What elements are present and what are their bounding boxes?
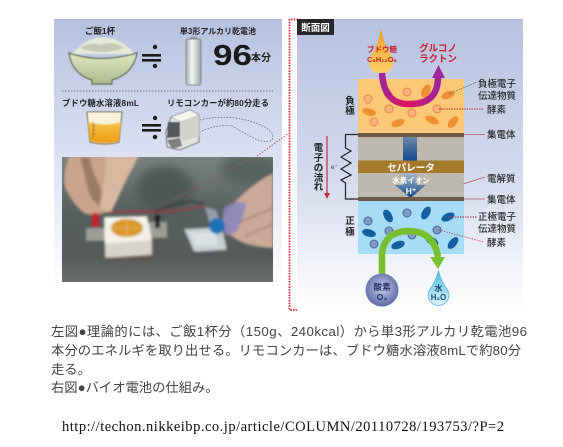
label: gluconolactone: ラクトン [419, 54, 457, 65]
cathode layer [358, 201, 464, 254]
label: anode mediator: 伝達物質 [478, 90, 517, 102]
label: electron flow: 流 [314, 172, 324, 184]
blue mediator particles [361, 205, 460, 251]
panel frame: red dotted bracket [290, 20, 298, 310]
photo: bio battery demonstration [62, 154, 280, 282]
caption text: 走る。 [51, 362, 91, 377]
label: top collector: 集電体 [487, 129, 516, 141]
arrow: hydrogen ions: 水素イオン [392, 175, 430, 185]
label: gluconolactone [419, 42, 457, 65]
figure: 96 batteries: 本分 [251, 51, 271, 64]
icon: water drop: H₂O [431, 293, 446, 302]
separator [358, 160, 464, 174]
label: gluconolactone: グルコノ [419, 42, 457, 54]
heading: cross-section badge: 断面図 [301, 22, 330, 34]
orange mediator particles [361, 83, 460, 130]
icon: glucose drop: C₆H₁₂O₆ [367, 55, 397, 64]
heading: glucose solution 8mL: ブドウ糖水溶液8mL [62, 98, 139, 108]
label: anode mediator [449, 78, 517, 102]
icon: water drop: 水 [434, 283, 442, 293]
icon: beaker of glucose solution [87, 112, 122, 144]
label: cathode mediator [450, 211, 517, 235]
icon: glucose drop [367, 28, 397, 74]
label: cathode mediator: 伝達物質 [478, 223, 517, 235]
icon: oxygen sphere [366, 274, 398, 306]
label: negative electrode: 負 [345, 95, 355, 107]
label: positive electrode: 正 [345, 216, 355, 227]
enzyme particles [364, 88, 441, 126]
icon: oxygen sphere: 酸素 [373, 282, 391, 292]
route of the car [200, 117, 273, 141]
separator: セパレータ [387, 162, 435, 174]
caption text: 左図●理論的には、ご飯1杯分（150g、240kcal）から単3形アルカリ乾電池96 [51, 323, 527, 339]
label: electron flow: 子 [314, 153, 324, 164]
label: cathode enzyme [439, 230, 507, 249]
label: cathode mediator: 正極電子 [478, 211, 517, 223]
label: positive electrode: 極 [345, 226, 355, 238]
icon: nearly-equal sign [142, 45, 161, 68]
caption text: 右図●バイオ電池の仕組み。 [51, 380, 219, 395]
panel: left rice energy comparison [54, 19, 282, 287]
label: anode enzyme [439, 104, 507, 116]
label: electrolyte: 電解質 [487, 173, 516, 185]
collector bar top [358, 133, 464, 137]
heading: AA alkaline battery: 単3形アルカリ乾電池 [180, 26, 256, 36]
label: anode mediator: 負極電子 [478, 78, 517, 90]
label: electron flow: の [314, 163, 323, 174]
icon: AA battery [186, 37, 201, 85]
source URL: http://techon.nikkeibp.co.jp/article/COLUMN/20110728/193753/?P=2 [62, 419, 504, 435]
anode layer [358, 79, 464, 133]
connector: red dotted leader [257, 133, 289, 156]
label: negative electrode: 極 [345, 105, 355, 117]
heading: remote car runs 80 minutes: リモコンカーが約80分走る [167, 98, 269, 108]
label: electron flow: れ [314, 182, 324, 193]
icon: nearly-equal sign [142, 116, 161, 139]
arrow: hydrogen ions [392, 173, 430, 198]
caption text: 本分のエネルギを取り出せる。リモコンカーは、ブドウ糖水溶液8mLで約80分 [51, 342, 521, 358]
label: electron flow [314, 143, 324, 193]
label: electrolyte [463, 173, 516, 185]
heading: cross-section badge [297, 19, 334, 35]
icon: glucose drop: ブドウ糖 [367, 44, 397, 54]
arrow: glucose to gluconolactone [382, 65, 445, 104]
arrow: hydrogen ions: H⁺ [406, 186, 417, 196]
label: bottom collector: 集電体 [487, 194, 516, 206]
label: anode enzyme: 酵素 [487, 104, 507, 116]
label: positive electrode [345, 216, 355, 238]
label: negative electrode [345, 95, 355, 117]
panel: right cross-section diagram [297, 19, 523, 311]
arrow: electron flow: e⁻ [331, 164, 339, 171]
heading: one bowl of rice: ご飯1杯 [85, 26, 116, 36]
figure: 96 batteries: 96 [213, 40, 252, 72]
arrow: electron flow [324, 136, 339, 199]
collector bar bottom [358, 197, 464, 201]
electrolyte layer [358, 137, 464, 197]
icon: rice bowl [69, 38, 137, 84]
label: electron flow: 電 [314, 143, 324, 154]
label: cathode enzyme: 酵素 [487, 237, 507, 249]
label: bottom collector [464, 194, 516, 206]
arrow: oxygen to water [382, 231, 445, 274]
circuit with resistor [341, 134, 358, 199]
icon: remote control car [166, 110, 199, 150]
caption text [51, 323, 527, 395]
label: top collector [464, 129, 516, 141]
enzyme particles [364, 209, 441, 248]
figure: 96 batteries [213, 40, 271, 72]
icon: oxygen sphere: O₂ [377, 292, 387, 302]
icon: water drop [428, 271, 449, 306]
